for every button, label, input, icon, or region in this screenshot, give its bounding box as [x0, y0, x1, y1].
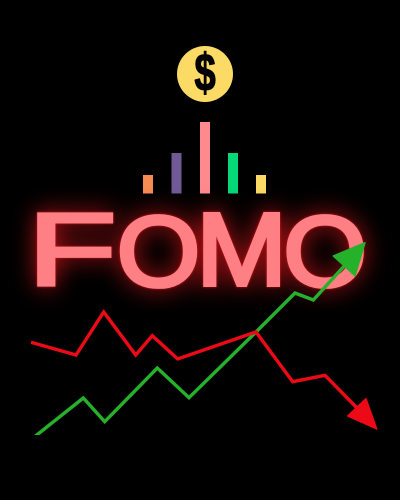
green rising line with arrow	[33, 243, 365, 438]
title: FOMO neon lettering	[28, 192, 367, 307]
title: FOMO neon lettering: O	[283, 195, 367, 307]
title: FOMO neon lettering: O	[117, 195, 200, 307]
title: FOMO neon lettering: F	[28, 192, 117, 307]
icon: dollar coin: $	[194, 42, 216, 102]
infographic canvas	[18, 46, 382, 435]
red falling line with arrow	[31, 312, 377, 429]
bar chart	[143, 122, 266, 194]
title: FOMO neon lettering: M	[196, 192, 287, 307]
icon: dollar coin	[177, 42, 233, 102]
